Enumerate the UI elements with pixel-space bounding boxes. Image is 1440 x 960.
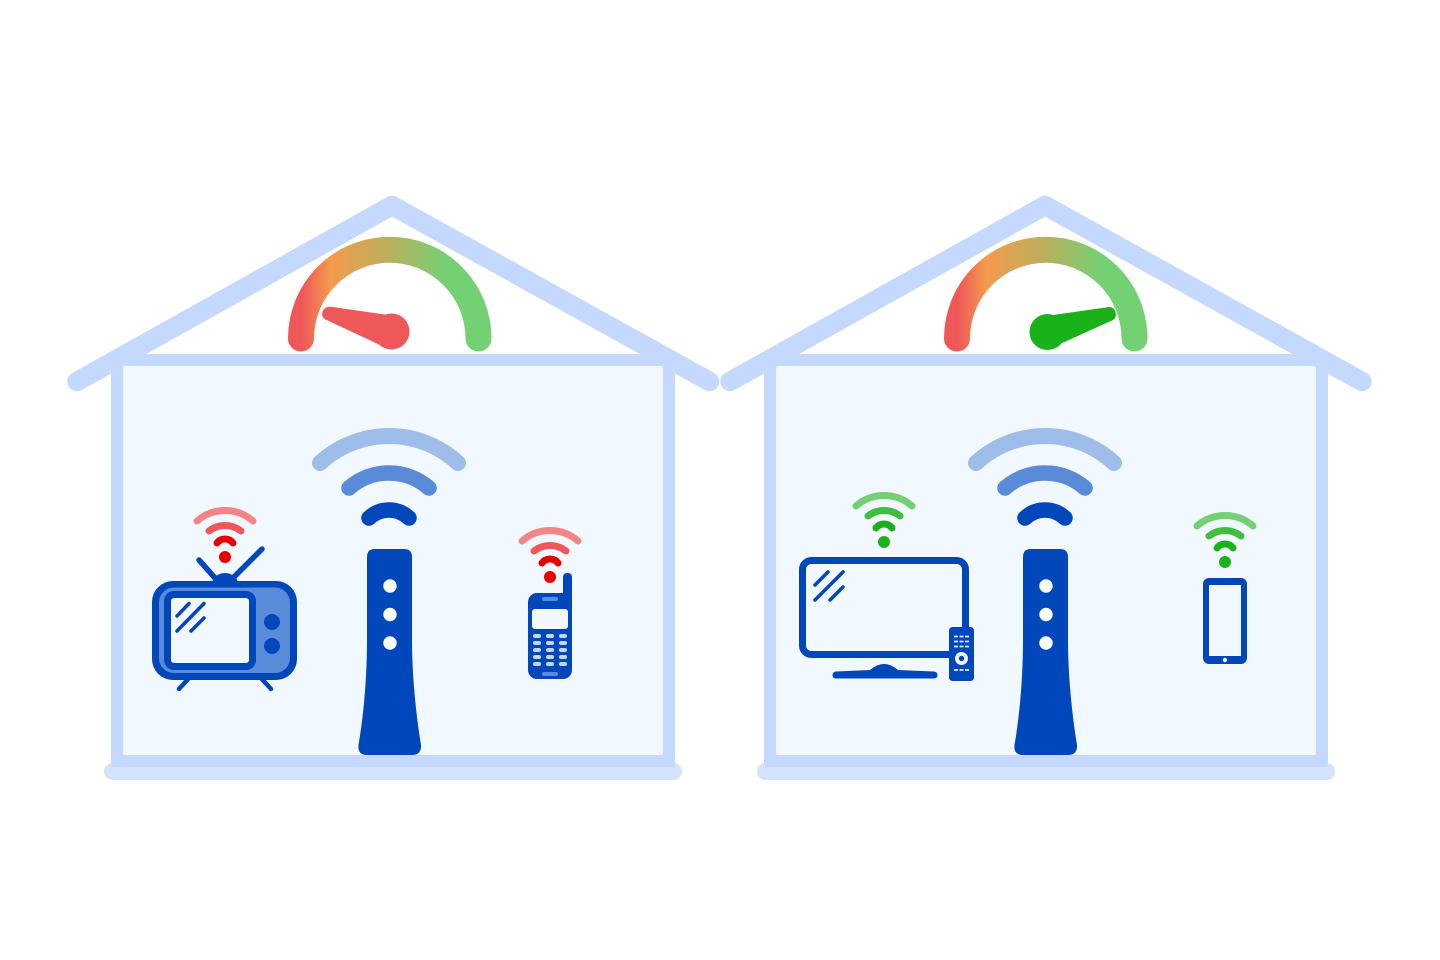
router wifi signal — [976, 436, 1114, 518]
speed gauge: slow — [301, 250, 478, 350]
gauge needle: pointing to slow — [322, 307, 410, 350]
television wifi signal — [197, 511, 253, 563]
television wifi signal — [856, 496, 912, 548]
speed gauge: fast — [957, 250, 1134, 350]
icon: smartphone — [1203, 578, 1247, 664]
router — [358, 549, 421, 755]
house structure — [77, 206, 710, 780]
panel: left house — [77, 206, 710, 780]
smartphone wifi signal — [1197, 516, 1253, 568]
router wifi signal — [320, 436, 458, 518]
house structure — [730, 206, 1362, 780]
panel: right house — [730, 206, 1362, 780]
icon: old television — [152, 549, 297, 689]
icon: flat screen television with remote — [802, 560, 974, 681]
mobile phone wifi signal — [522, 531, 578, 583]
icon: old mobile phone — [528, 573, 572, 679]
router — [1014, 549, 1077, 755]
icon: remote control — [949, 627, 974, 681]
gauge needle: pointing to fast — [1030, 307, 1116, 350]
